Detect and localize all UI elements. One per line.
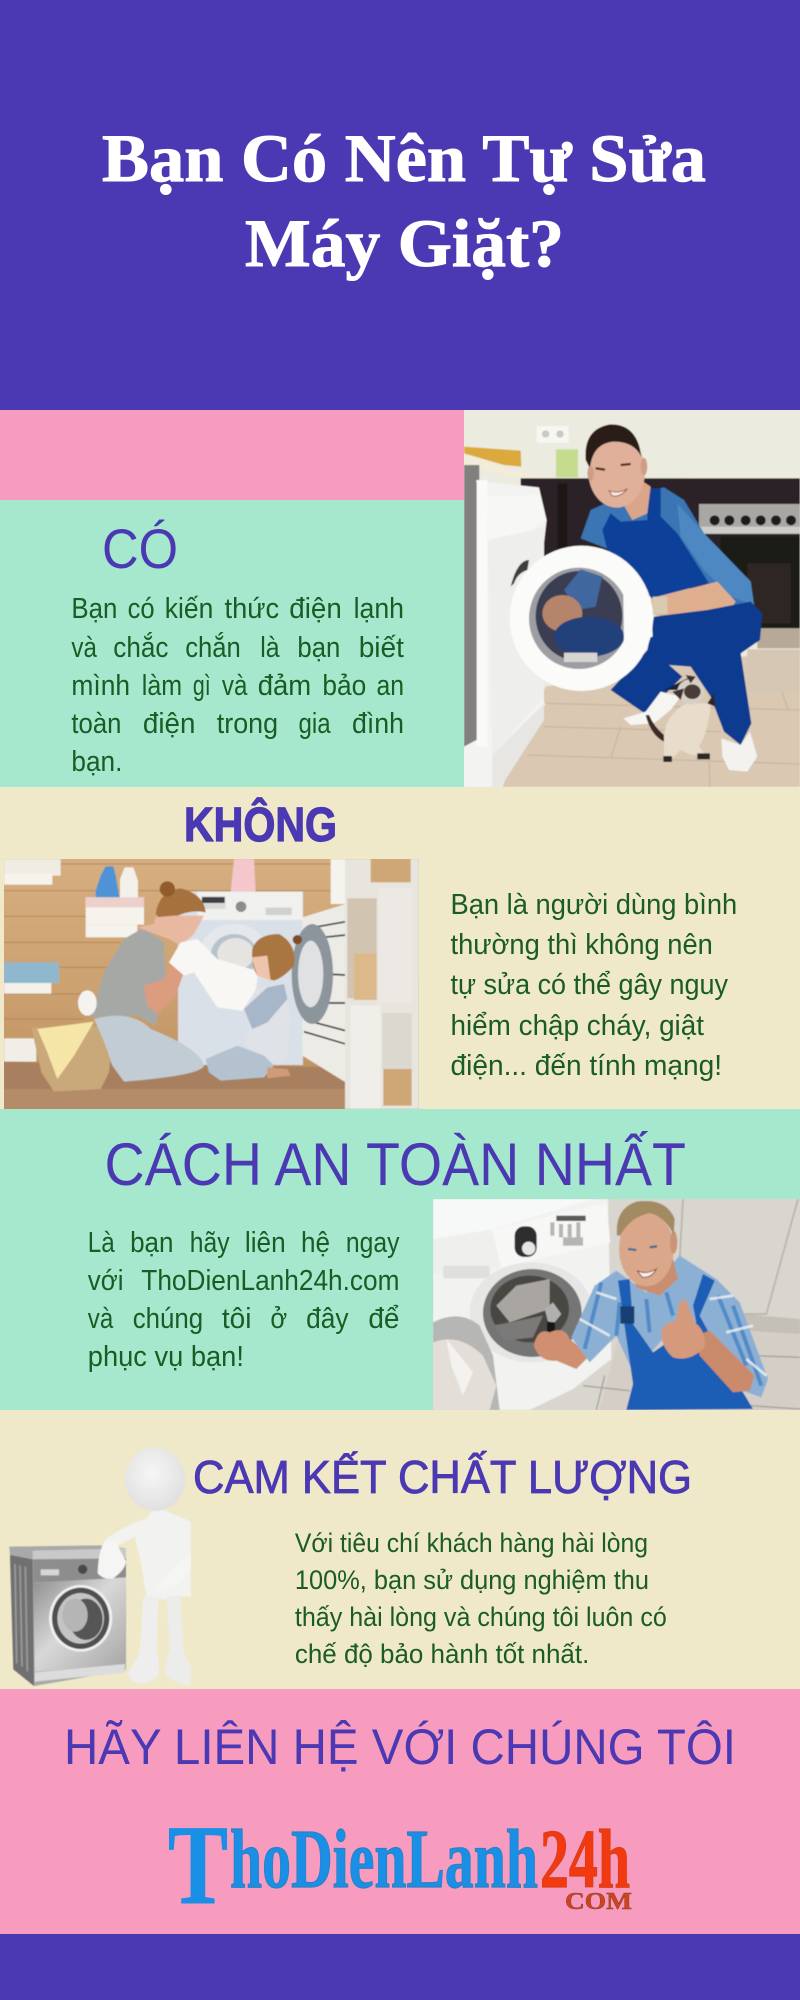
text block: có: chắn [185,631,241,664]
text block: có: điện [289,593,342,625]
head [633,1259,678,1296]
title: Máy Giặt? [245,205,564,281]
text block: cách an toàn nhất: hãy [190,1227,230,1259]
title [102,120,706,281]
text block: không: điện... đến tính mạng! [450,1050,722,1082]
heading: contact: HÃY LIÊN HỆ VỚI CHÚNG TÔI [64,1719,736,1775]
logo: ThoDienLanh24h.com: T [168,1803,228,1928]
text block: cách an toàn nhất: bạn [130,1227,174,1259]
text block: có: bạn [297,632,340,664]
arm and thumb [696,1331,755,1392]
text block: cách an toàn nhất: đây [306,1303,349,1335]
logo: ThoDienLanh24h.com: 24h [540,1813,630,1906]
text block: cách an toàn nhất: với [88,1265,124,1297]
text block: không: hiểm chập cháy, giật [450,1010,704,1042]
text block: cách an toàn nhất: chúng [133,1303,203,1335]
text block: có: an [376,670,404,702]
hand with pliers [547,1321,555,1339]
towel [169,939,258,1012]
photo: mother and child at washing machine [4,859,419,1109]
text block: có: điện [143,708,195,740]
machine door open [292,924,333,1024]
text block: có: bảo [322,670,366,702]
text block: có: Bạn [71,593,117,625]
panel: không [0,787,800,1109]
text block: có: bạn. [71,746,122,778]
figure [107,1510,191,1600]
photo: repairman with washing machine and kitten [464,410,800,787]
text block: cách an toàn nhất: Là [88,1227,116,1259]
photo: smiling repairman thumbs up [433,1199,800,1410]
logo: ThoDienLanh24h.com [168,1803,632,1928]
text block: cách an toàn nhất: ThoDienLanh24h.com [141,1265,400,1297]
man [581,487,754,607]
text block: có: biết [359,632,404,664]
text block: cách an toàn nhất: và [88,1303,114,1335]
text block: có: gì [193,670,211,702]
text block: có: có [128,593,155,625]
header band [0,0,800,410]
text block: có: thức [224,593,279,625]
text block: cách an toàn nhất: tôi [222,1303,252,1335]
text block: có: đảm [258,670,311,702]
text block: cam kết chất lượng: 100%, bạn sử dụng nghiệm thu [295,1565,649,1595]
text block: cam kết chất lượng: Với tiêu chí khách hàng hài lòng [295,1528,648,1558]
text block: có: chắc [113,631,168,664]
text block: có: kiến [165,593,213,625]
overalls [618,1274,753,1410]
panel: pink strip [0,410,464,500]
text block: có: và [222,670,248,702]
child [252,934,295,981]
shirt [571,1256,768,1397]
text block: có: lạnh [354,593,404,625]
logo: ThoDienLanh24h.com: COM [565,1889,632,1915]
text block: cách an toàn nhất: hệ [301,1227,330,1259]
basket [31,1026,112,1092]
heading: cách an toàn nhất: CÁCH AN TOÀN NHẤT [104,1131,686,1198]
text block: không: Bạn là người dùng bình [450,889,737,921]
illustration: white figure leaning on washing machine [9,1448,192,1686]
right wall and shelves [302,904,346,1082]
text block: có: và [71,632,98,664]
heading: cam kết chất lượng: CAM KẾT CHẤT LƯỢNG [193,1451,692,1503]
text block: có: đình [352,708,404,740]
text block: không: tự sửa có thể gây nguy [450,969,728,1001]
text block: có: trong [217,708,278,740]
text block: cách an toàn nhất: để [368,1303,400,1335]
heading: không: KHÔNG [184,797,337,852]
washer [178,892,303,1065]
woman [91,927,166,1026]
panel: contact [0,1689,800,1934]
title: Bạn Có Nên Tự Sửa [102,120,706,196]
panel: có [0,500,464,787]
text block: cam kết chất lượng: chế độ bảo hành tốt nhất. [295,1639,589,1669]
door [510,546,653,691]
text block: có: gia [298,708,331,740]
kitten [646,715,664,742]
text block: cách an toàn nhất: phục vụ bạn! [88,1341,244,1373]
panel: cách an toàn nhất [0,1109,800,1410]
logo: ThoDienLanh24h.com: hoDienLanh [230,1813,538,1906]
text block: cách an toàn nhất: ở [270,1303,287,1335]
footer band [0,1934,800,2000]
heading: có: CÓ [102,517,178,580]
text block: có: toàn [71,708,121,740]
text block: cách an toàn nhất: liên [245,1227,286,1259]
panel: cam kết chất lượng [0,1410,800,1690]
text block: cách an toàn nhất: ngay [346,1227,400,1259]
text block: có: làm [142,670,182,702]
text block: có: mình [71,670,130,702]
text block: không: thường thì không nên [450,929,713,961]
text block: có: là [260,632,280,664]
text block: cam kết chất lượng: thấy hài lòng và chúng tôi luôn có [295,1602,667,1632]
